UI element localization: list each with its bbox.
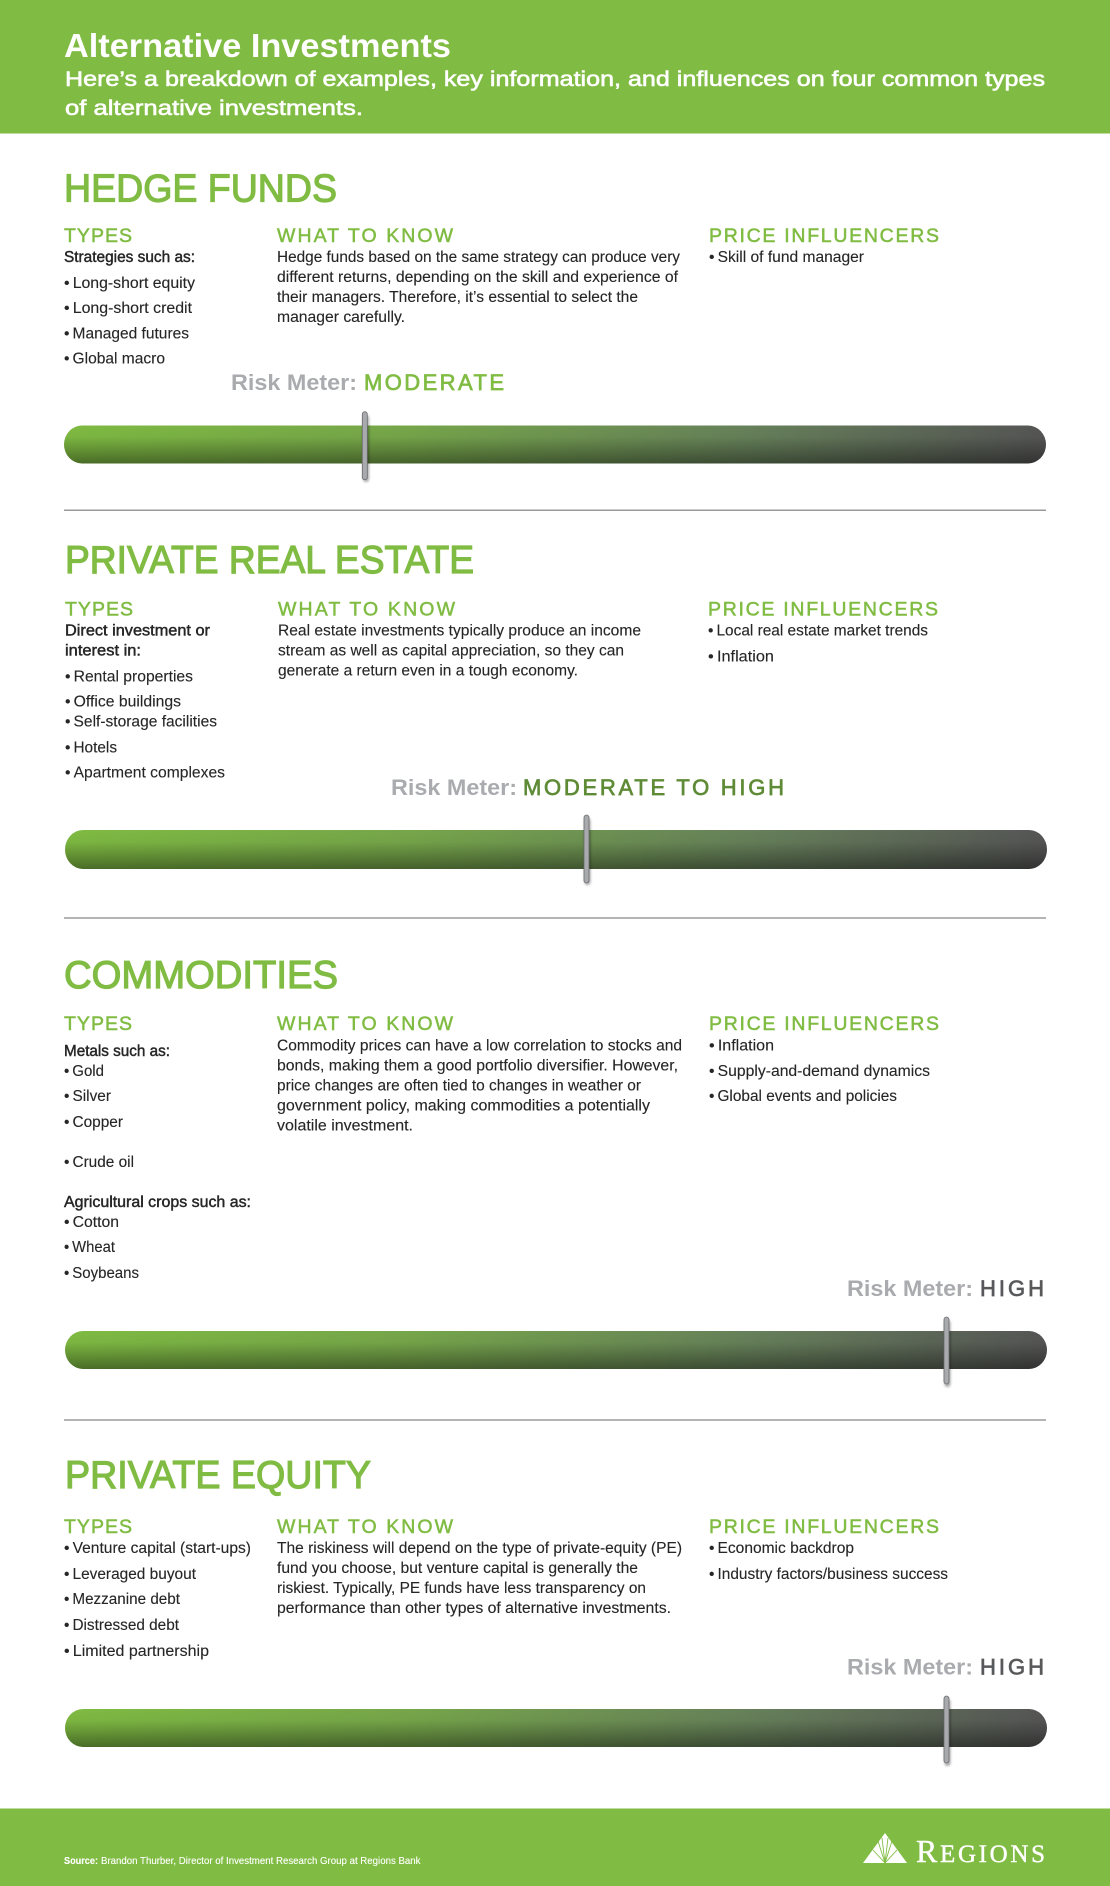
column: what to know bbox=[277, 225, 680, 326]
column: price influencers: • Local real estate market trends bbox=[708, 623, 928, 640]
column: what to know: manager carefully. bbox=[277, 309, 405, 326]
heading: private real estate: PRIVATE REAL ESTATE bbox=[65, 539, 474, 582]
risk meter label: Risk Meter: bbox=[391, 775, 517, 800]
logo wordmark: REGIONS bbox=[916, 1833, 1045, 1869]
column: types: • Limited partnership bbox=[64, 1643, 209, 1660]
column: price influencers: • Economic backdrop bbox=[709, 1540, 854, 1557]
subtitle bbox=[65, 67, 1045, 120]
risk meter bar bbox=[65, 1696, 1047, 1766]
column: what to know: performance than other types of alternative investments. bbox=[277, 1600, 671, 1617]
column: what to know: Commodity prices can have a low correlation to stocks and bbox=[277, 1038, 682, 1054]
source note: Brandon Thurber, Director of Investment Research Group at Regions Bank bbox=[101, 1855, 421, 1867]
column: types: interest in: bbox=[65, 643, 141, 660]
column: types: Metals such as: bbox=[64, 1043, 170, 1060]
footer band bbox=[0, 1808, 1110, 1886]
column: price influencers bbox=[709, 225, 939, 266]
risk meter label: HIGH bbox=[980, 1276, 1044, 1301]
column: types: • Crude oil bbox=[64, 1154, 134, 1171]
column: types: • Long-short equity bbox=[64, 275, 195, 292]
column: price influencers: PRICE INFLUENCERS bbox=[708, 599, 938, 621]
column: types: • Distressed debt bbox=[64, 1617, 180, 1634]
panel: commodities bbox=[64, 954, 1047, 1387]
column: types: • Mezzanine debt bbox=[64, 1591, 181, 1608]
column: types: TYPES bbox=[64, 225, 132, 247]
column: types bbox=[65, 599, 225, 782]
subtitle: Here’s a breakdown of examples, key information, and influences on four common types bbox=[65, 67, 1045, 91]
risk meter label bbox=[231, 370, 504, 395]
column: price influencers: • Skill of fund manager bbox=[709, 249, 864, 266]
panel: private real estate bbox=[65, 539, 1047, 885]
panel: private equity bbox=[64, 1454, 1047, 1766]
risk meter label: MODERATE bbox=[364, 370, 504, 395]
column: what to know: fund you choose, but venture capital is generally the bbox=[277, 1560, 638, 1577]
panel: hedge funds bbox=[64, 168, 1046, 482]
column: what to know bbox=[277, 1013, 682, 1134]
column: types: Agricultural crops such as: bbox=[64, 1194, 251, 1211]
column: what to know: their managers. Therefore, it’s essential to select the bbox=[277, 289, 638, 306]
column: what to know: different returns, depending on the skill and experience of bbox=[277, 269, 679, 286]
column: types bbox=[64, 1516, 251, 1660]
column: what to know: The riskiness will depend on the type of private-equity (PE) bbox=[277, 1540, 682, 1557]
risk meter label: Risk Meter: bbox=[231, 370, 357, 395]
risk meter label bbox=[847, 1654, 1044, 1680]
icon: regions logo triangle bbox=[863, 1833, 907, 1863]
risk meter label: Risk Meter: bbox=[847, 1654, 973, 1680]
source note: Source: bbox=[64, 1855, 98, 1867]
column: price influencers: PRICE INFLUENCERS bbox=[709, 1516, 939, 1538]
column: what to know: generate a return even in a tough economy. bbox=[278, 663, 578, 680]
column: price influencers: • Industry factors/business success bbox=[709, 1566, 948, 1583]
column: price influencers bbox=[708, 599, 938, 666]
column: what to know: price changes are often tied to changes in weather or bbox=[277, 1078, 641, 1094]
risk meter bar bbox=[65, 815, 1047, 885]
column: types: • Soybeans bbox=[64, 1265, 139, 1282]
column: types: • Copper bbox=[64, 1114, 123, 1131]
column: what to know: riskiest. Typically, PE funds have less transparency on bbox=[277, 1580, 646, 1597]
column: types: Direct investment or bbox=[65, 623, 210, 640]
column: price influencers: PRICE INFLUENCERS bbox=[709, 1013, 939, 1035]
risk meter label bbox=[847, 1276, 1044, 1301]
subtitle: of alternative investments. bbox=[65, 96, 363, 120]
column: what to know: WHAT TO KNOW bbox=[277, 1516, 454, 1538]
title: Alternative Investments bbox=[64, 27, 451, 64]
column: what to know: Hedge funds based on the same strategy can produce very bbox=[277, 249, 680, 266]
column: price influencers: • Inflation bbox=[708, 649, 774, 666]
column: what to know: WHAT TO KNOW bbox=[278, 599, 456, 621]
column: price influencers: • Global events and policies bbox=[709, 1088, 897, 1105]
column: types: Strategies such as: bbox=[64, 249, 195, 266]
column: types bbox=[64, 1013, 251, 1282]
column: what to know: stream as well as capital appreciation, so they can bbox=[278, 643, 624, 660]
column: types: • Hotels bbox=[65, 740, 117, 757]
risk meter bar bbox=[64, 412, 1046, 482]
risk meter label: Risk Meter: bbox=[847, 1276, 973, 1301]
column: price influencers bbox=[709, 1516, 948, 1583]
column: types: • Gold bbox=[64, 1063, 104, 1080]
column: types: TYPES bbox=[64, 1013, 132, 1035]
column: what to know: Real estate investments typically produce an income bbox=[278, 623, 641, 640]
column: types: • Apartment complexes bbox=[65, 765, 225, 782]
column: types: • Managed futures bbox=[64, 326, 189, 342]
risk meter label: HIGH bbox=[980, 1654, 1044, 1680]
column: price influencers: PRICE INFLUENCERS bbox=[709, 225, 939, 247]
column: what to know: volatile investment. bbox=[277, 1118, 413, 1134]
risk meter label: MODERATE TO HIGH bbox=[523, 775, 784, 800]
column: types: • Venture capital (start-ups) bbox=[64, 1540, 251, 1557]
column: types: • Leveraged buyout bbox=[64, 1566, 197, 1583]
column: types: • Silver bbox=[64, 1088, 111, 1105]
column: what to know: WHAT TO KNOW bbox=[277, 1013, 454, 1035]
column: types: • Self-storage facilities bbox=[65, 714, 217, 731]
risk meter bar bbox=[65, 1317, 1047, 1387]
column: types: • Long-short credit bbox=[64, 300, 193, 317]
column: types: • Wheat bbox=[64, 1239, 116, 1256]
column: types: TYPES bbox=[65, 599, 133, 621]
column: price influencers bbox=[709, 1013, 939, 1105]
column: what to know: government policy, making commodities a potentially bbox=[277, 1098, 650, 1114]
column: types bbox=[64, 225, 195, 368]
column: price influencers: • Inflation bbox=[709, 1038, 774, 1054]
column: types: TYPES bbox=[64, 1516, 132, 1538]
column: types: • Global macro bbox=[64, 350, 165, 368]
column: what to know bbox=[277, 1516, 682, 1617]
column: types: • Rental properties bbox=[65, 669, 193, 686]
heading: hedge funds: HEDGE FUNDS bbox=[64, 168, 337, 210]
column: price influencers: • Supply-and-demand dynamics bbox=[709, 1063, 930, 1080]
column: types: • Office buildings bbox=[65, 694, 181, 711]
heading: private equity: PRIVATE EQUITY bbox=[65, 1454, 371, 1497]
header band bbox=[0, 0, 1110, 134]
column: what to know: WHAT TO KNOW bbox=[277, 225, 454, 247]
heading: commodities: COMMODITIES bbox=[64, 954, 338, 997]
risk meter label bbox=[391, 775, 784, 800]
column: what to know: bonds, making them a good portfolio diversifier. However, bbox=[277, 1058, 678, 1074]
column: what to know bbox=[278, 599, 641, 680]
column: types: • Cotton bbox=[64, 1214, 119, 1231]
